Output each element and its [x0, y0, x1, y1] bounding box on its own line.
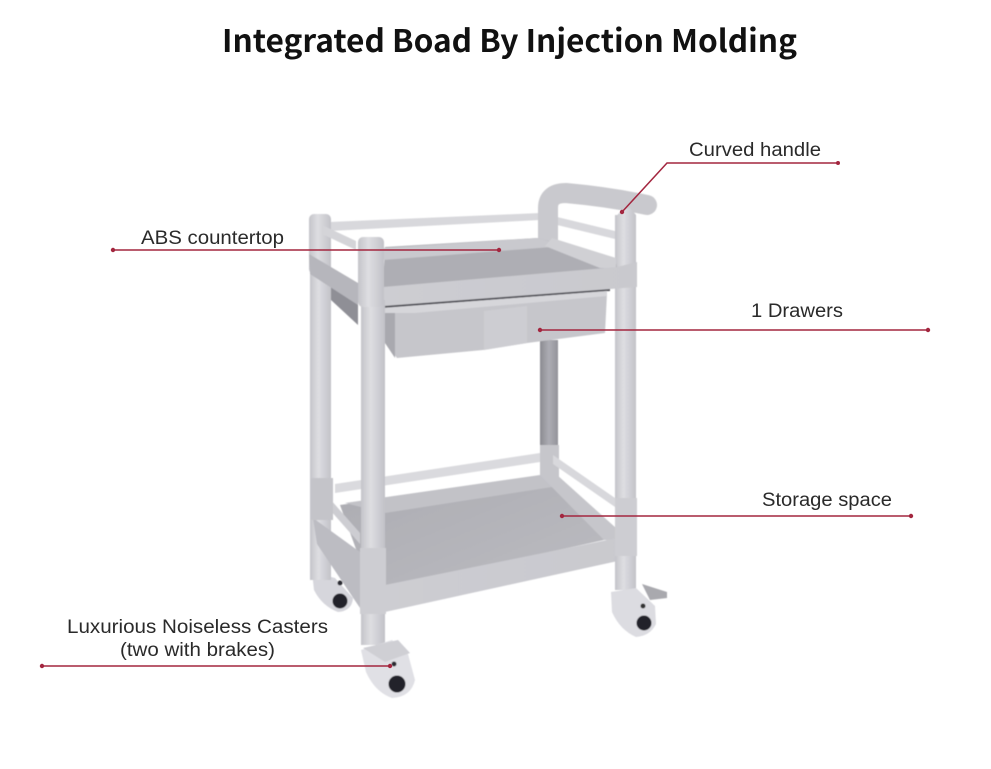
upper right rail [553, 216, 615, 239]
lower left rail [323, 491, 360, 544]
lower tray right rim [540, 474, 616, 540]
top tray left band [309, 254, 358, 305]
front-left caster [361, 640, 415, 698]
callout: curved handle: Curved handle [689, 140, 821, 161]
callout: 1 Drawers: 1 Drawers [751, 301, 843, 322]
top tray front band [383, 262, 637, 306]
back-right post, lower section [540, 340, 558, 465]
lower right rail [553, 455, 615, 507]
back-left post top [309, 214, 331, 274]
lower back rail [335, 453, 540, 493]
callout: ABS countertop: ABS countertop [141, 228, 284, 249]
lower tray rim [345, 475, 552, 513]
title: Integrated Boad By Injection Molding [222, 16, 797, 61]
upper left rail [322, 225, 356, 250]
drawer [383, 289, 610, 358]
right post collar [615, 498, 637, 556]
callout: Storage space: Storage space [762, 490, 892, 511]
front-left post top [358, 237, 384, 307]
handle stem [615, 208, 636, 265]
top tray right rim [545, 238, 616, 268]
top tray back rim [383, 238, 565, 260]
callout: ABS countertop [111, 228, 501, 252]
product photo: two-tier medical cart [309, 193, 667, 698]
callout: 1 Drawers [538, 301, 930, 332]
back-left caster [312, 572, 353, 612]
front-left lower collar [360, 548, 386, 614]
callout: curved handle [620, 140, 840, 214]
front-right post [615, 215, 636, 590]
back-right post, lower collar [540, 445, 559, 490]
lower left band [313, 518, 360, 608]
back-left post [310, 270, 331, 580]
back-right caster [611, 584, 667, 637]
callout: Luxurious Noiseless Casters: (two with brakes) [120, 640, 275, 661]
curved handle [548, 193, 647, 240]
callout: Luxurious Noiseless Casters [40, 617, 392, 668]
front-left post [361, 300, 385, 645]
upper back rail [330, 213, 540, 231]
lower tray surface [340, 477, 613, 588]
shadow under top tray on back-left post [331, 284, 358, 325]
lower left post collar [311, 478, 333, 520]
callout: Luxurious Noiseless Casters: Luxurious Noiseless Casters [67, 617, 328, 638]
lower front band [385, 538, 636, 612]
callout: Storage space [560, 490, 913, 518]
top tray surface [383, 238, 617, 288]
